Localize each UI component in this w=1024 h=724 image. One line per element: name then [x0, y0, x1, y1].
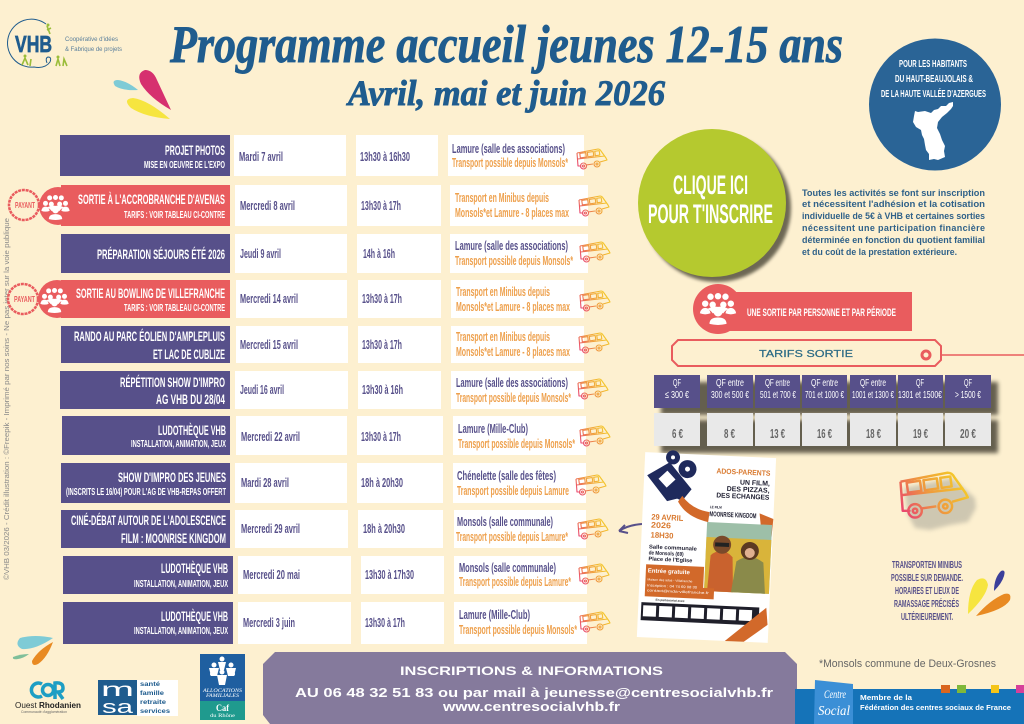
row 5: rando parc éolien — [61, 326, 609, 363]
table: QF tarifs: 6 € — [672, 427, 683, 441]
logo: MSA: sa — [102, 697, 135, 717]
row 7: ludothèque 22 avril — [62, 416, 610, 455]
row 6: répétition show: 13h30 à 16h — [362, 383, 403, 397]
icon: film camera — [645, 449, 712, 522]
logo: CAF du Rhône: FAMILIALES — [205, 694, 240, 699]
note: transport minibus: RAMASSAGE PRÉCISÉS — [894, 597, 959, 610]
poster: ados-parents film — [637, 449, 776, 643]
table: QF tarifs: > 1500 € — [955, 389, 981, 401]
logo: Ouest Rhodanien: Communauté d'agglomération — [21, 710, 67, 714]
note: transport minibus: ULTÉRIEUREMENT. — [901, 610, 953, 623]
footer: fédération des centres sociaux — [795, 680, 1024, 724]
row 7: ludothèque 22 avril: Transport possible depuis Monsols* — [458, 436, 575, 451]
poster: ados-parents film: 29 AVRIL — [651, 512, 684, 523]
row 2: accrobranche, payant — [9, 185, 609, 226]
row 5: rando parc éolien: RANDO AU PARC ÉOLIEN D'AMPLEPLUIS — [74, 328, 225, 344]
logo: VHB: & Fabrique de projets — [65, 46, 123, 53]
row 9: ciné-débat: Mercredi 29 avril — [241, 522, 300, 536]
decorative petals top left — [114, 70, 171, 119]
poster: ados-parents film: 18H30 — [650, 530, 674, 541]
row 11: ludothèque 3 juin: LUDOTHÈQUE VHB — [161, 608, 228, 624]
row 4: bowling, payant: Mercredi 14 avril — [240, 292, 298, 306]
row 10: ludothèque 20 mai: Monsols (salle communale) — [459, 560, 556, 575]
decorative petals lower right — [968, 571, 1010, 616]
footer: fédération des centres sociaux: Membre de la — [860, 693, 913, 702]
row 8: show d'impro: (INSCRITS LE 16/04) POUR L'AG DE VHB-REPAS OFFERT — [66, 486, 226, 498]
row 5: rando parc éolien: Mercredi 15 avril — [240, 338, 298, 352]
row 9: ciné-débat: 18h à 20h30 — [363, 522, 405, 536]
logo: MSA: m — [101, 680, 134, 701]
table: QF tarifs: ≤ 300 € — [665, 389, 689, 401]
logo: MSA — [98, 680, 178, 717]
footer: fédération des centres sociaux: Fédération des centres sociaux de France — [860, 703, 1011, 712]
table: QF tarifs: 1001 et 1300 € — [852, 389, 894, 401]
row 9: ciné-débat: Monsols (salle communale) — [457, 514, 553, 529]
row 6: répétition show: Jeudi 16 avril — [240, 383, 284, 397]
green button: clique ici: CLIQUE ICI — [673, 170, 748, 200]
row 7: ludothèque 22 avril: 13h30 à 17h — [361, 430, 401, 444]
paragraph: conditions: et du coût de la prestation extérieure. — [802, 247, 957, 257]
row 7: ludothèque 22 avril: Mercredi 22 avril — [241, 430, 300, 444]
blue circle: territory: DU HAUT-BEAUJOLAIS & — [895, 74, 973, 85]
row 4: bowling, payant: Transport en Minibus depuis — [456, 284, 550, 299]
row 11: ludothèque 3 juin: INSTALLATION, ANIMATION, JEUX — [134, 625, 228, 637]
green button: clique ici — [638, 129, 791, 282]
row 3: préparation séjours: PRÉPARATION SÉJOURS ÉTÉ 2026 — [97, 246, 225, 262]
row 1: projet photos: Lamure (salle des associations) — [452, 141, 565, 156]
table shadows — [661, 382, 998, 453]
row 6: répétition show — [60, 371, 608, 409]
arrow to poster — [619, 524, 642, 533]
row 2: accrobranche, payant: TARIFS : VOIR TABLEAU CI-CONTRE — [124, 209, 225, 221]
row 2: accrobranche, payant: 13h30 à 17h — [361, 199, 401, 213]
table: QF tarifs: 18 € — [866, 427, 881, 441]
row 6: répétition show: AG VHB DU 28/04 — [156, 391, 225, 407]
note: Monsols: *Monsols commune de Deux-Grosnes — [819, 658, 996, 670]
row 11: ludothèque 3 juin: Mercredi 3 juin — [243, 616, 295, 630]
row 1: projet photos: Transport possible depuis Monsols* — [452, 155, 568, 170]
row 3: préparation séjours: 14h à 16h — [363, 247, 395, 261]
paragraph: conditions: individuelle de 5€ à VHB et certaines sorties — [802, 211, 985, 221]
row 5: rando parc éolien: 13h30 à 17h — [362, 338, 402, 352]
poster: ados-parents film: Salle communale — [649, 544, 697, 553]
row 2: accrobranche, payant: Mercredi 8 avril — [240, 199, 295, 213]
logo: MSA: retraite — [140, 699, 166, 706]
row 11: ludothèque 3 juin — [63, 602, 610, 644]
banner: une sortie par personne: UNE SORTIE PAR PERSONNE ET PAR PÉRIODE — [747, 306, 896, 319]
row 8: show d'impro: Transport possible depuis Lamure — [457, 483, 569, 498]
poster: ados-parents film: LE FILM — [710, 505, 722, 510]
logo: Ouest Rhodanien: Ouest Rhodanien — [15, 701, 81, 710]
logo: MSA: famille — [140, 690, 164, 697]
panel: inscriptions et informations — [263, 652, 797, 724]
tarifs heading — [672, 340, 1024, 366]
icon: territory map — [913, 102, 953, 160]
poster: ados-parents film: En partenariat avec — [655, 598, 685, 603]
table: QF tarifs: QF entre — [716, 377, 744, 389]
poster: ados-parents film: de Monsols (69) — [649, 550, 684, 558]
row 5: rando parc éolien: Monsols*et Lamure - 8 places max — [456, 344, 570, 359]
row 8: show d'impro: SHOW D'IMPRO DES JEUNES — [118, 469, 226, 485]
poster: ados-parents film: DES PIZZAS, — [726, 486, 770, 495]
row 6: répétition show: Transport possible depuis Monsols* — [456, 390, 571, 405]
logo: CAF du Rhône: Caf — [216, 703, 230, 713]
table: QF tarifs: 701 et 1000 € — [805, 389, 844, 401]
row 4: bowling, payant: Monsols*et Lamure - 8 places max — [456, 299, 570, 314]
row 4: bowling, payant: TARIFS : VOIR TABLEAU CI-CONTRE — [124, 302, 225, 314]
row 2: accrobranche, payant: Monsols*et Lamure - 8 places max — [455, 205, 569, 220]
table: QF tarifs: 1301 et 1500€ — [898, 389, 942, 401]
row 8: show d'impro — [61, 463, 606, 503]
logo: CAF du Rhône — [200, 654, 245, 720]
title: Programme accueil jeunes 12-15 ans — [169, 16, 843, 74]
row 3: préparation séjours — [61, 234, 610, 273]
poster: ados-parents film: UN FILM, — [740, 479, 770, 488]
subtitle: Avril, mai et juin 2026 — [346, 73, 665, 113]
row 9: ciné-débat: FILM : MOONRISE KINGDOM — [121, 530, 226, 546]
row 9: ciné-débat: Transport possible depuis Lamure* — [456, 529, 568, 544]
row 11: ludothèque 3 juin: Lamure (Mille-Club) — [459, 607, 530, 622]
table: QF tarifs: 8 € — [724, 427, 735, 441]
logo: CAF du Rhône: ALLOCATIONS — [202, 689, 243, 694]
tarifs heading: TARIFS SORTIE — [759, 349, 853, 360]
row 10: ludothèque 20 mai — [63, 556, 609, 594]
logo: Ouest Rhodanien — [15, 683, 81, 714]
logo: CAF du Rhône: du Rhône — [210, 714, 236, 719]
row 2: accrobranche, payant: Transport en Minibus depuis — [455, 190, 549, 205]
row 7: ludothèque 22 avril: INSTALLATION, ANIMATION, JEUX — [131, 438, 226, 450]
row 4: bowling, payant: PAYANT — [14, 294, 36, 304]
row 11: ludothèque 3 juin: 13h30 à 17h — [365, 616, 405, 630]
paragraph: conditions: nécessitent une participation financière — [802, 223, 985, 233]
paragraph: conditions: et nécessitent l'adhésion et la cotisation — [802, 199, 985, 209]
row 5: rando parc éolien: ET LAC DE CUBLIZE — [153, 346, 225, 362]
logo: VHB: Coopérative d'idées — [65, 36, 119, 43]
row 1: projet photos: MISE EN OEUVRE DE L'EXPO — [144, 159, 225, 171]
row 10: ludothèque 20 mai: INSTALLATION, ANIMATION, JEUX — [134, 578, 228, 590]
footer: fédération des centres sociaux: Social — [818, 704, 850, 719]
film strip with partner logos — [640, 602, 768, 643]
row 5: rando parc éolien: Transport en Minibus depuis — [456, 329, 550, 344]
row 7: ludothèque 22 avril: Lamure (Mille-Club) — [458, 421, 528, 436]
row 7: ludothèque 22 avril: LUDOTHÈQUE VHB — [158, 422, 226, 438]
logo: VHB — [8, 19, 123, 67]
row 9: ciné-débat: CINÉ-DÉBAT AUTOUR DE L'ADOLESCENCE — [71, 512, 226, 528]
row 11: ludothèque 3 juin: Transport possible depuis Monsols* — [459, 622, 577, 637]
icon: large minibus — [900, 473, 976, 530]
row 4: bowling, payant — [8, 280, 610, 318]
row 6: répétition show: Lamure (salle des associations) — [456, 375, 568, 390]
poster: ados-parents film: Maison des ados - Villefranche — [647, 577, 693, 583]
table: QF tarifs: QF — [964, 377, 972, 389]
poster photo — [704, 522, 772, 594]
table: QF tarifs — [654, 375, 991, 446]
table: QF tarifs: 13 € — [770, 427, 785, 441]
poster: ados-parents film: contact@mda-villefranche.fr — [647, 588, 710, 595]
panel: inscriptions et informations: AU 06 48 32 51 83 ou par mail à jeunesse@centresocialvhb.fr — [295, 685, 773, 700]
table: QF tarifs: QF entre — [765, 377, 790, 389]
panel: inscriptions et informations: www.centresocialvhb.fr — [442, 699, 620, 714]
row 10: ludothèque 20 mai: 13h30 à 17h30 — [365, 568, 414, 582]
logo: MSA: services — [140, 708, 170, 715]
row 9: ciné-débat — [61, 510, 608, 548]
row 3: préparation séjours: Jeudi 9 avril — [240, 247, 281, 261]
banner: une sortie par personne — [693, 284, 912, 334]
table: QF tarifs: 20 € — [960, 427, 976, 441]
poster: ados-parents film: Place de l'Eglise — [648, 556, 692, 564]
table: QF tarifs: 501 et 700 € — [760, 389, 796, 401]
logo: VHB: VHB — [15, 31, 52, 57]
row 1: projet photos: 13h30 à 16h30 — [360, 150, 410, 164]
poster: ados-parents film: Entrée gratuite — [648, 568, 691, 576]
table: QF tarifs: QF entre — [811, 377, 838, 389]
vertical credit line: ©VHB 03/2026 - Crédit illustration : ©Freepik - Imprimé par nos soins - Ne pas jeter sur la voie publique — [2, 218, 11, 580]
footer: fédération des centres sociaux: Centre — [824, 687, 846, 701]
row 6: répétition show: RÉPÉTITION SHOW D'IMPRO — [120, 374, 225, 390]
blue circle: territory: POUR LES HABITANTS — [899, 59, 967, 70]
table: QF tarifs: 300 et 500 € — [711, 389, 749, 401]
row 3: préparation séjours: Lamure (salle des associations) — [455, 238, 568, 253]
poster: ados-parents film: DES ECHANGES — [716, 492, 770, 502]
note: transport minibus — [891, 559, 963, 623]
table: QF tarifs: QF — [673, 377, 681, 389]
paragraph: conditions: Toutes les activités se font sur inscription — [802, 188, 985, 198]
note: transport minibus: TRANSPORTEN MINIBUS — [892, 559, 962, 571]
poster: ados-parents film: 2026 — [651, 520, 672, 530]
row 1: projet photos — [60, 135, 607, 176]
row 3: préparation séjours: Transport possible depuis Monsols* — [455, 253, 573, 268]
decorative petals lower left — [13, 636, 53, 665]
row 10: ludothèque 20 mai: Transport possible depuis Lamure* — [459, 574, 571, 589]
logo: MSA: santé — [140, 681, 160, 688]
poster: ados-parents film: MOONRISE KINGDOM — [709, 511, 757, 520]
row 8: show d'impro: 18h à 20h30 — [361, 476, 403, 490]
row 1: projet photos: PROJET PHOTOS — [165, 142, 225, 158]
table: QF tarifs: QF entre — [860, 377, 886, 389]
row 8: show d'impro: Mardi 28 avril — [241, 476, 289, 490]
table: QF tarifs: 16 € — [817, 427, 832, 441]
table: QF tarifs: QF — [916, 377, 924, 389]
green button: clique ici: POUR T'INSCRIRE — [648, 199, 773, 229]
row 2: accrobranche, payant: PAYANT — [15, 200, 35, 210]
row 8: show d'impro: Chénelette (salle des fêtes) — [457, 468, 556, 483]
row 2: accrobranche, payant: SORTIE À L'ACCROBRANCHE D'AVENAS — [78, 191, 225, 207]
paragraph: conditions: déterminée en fonction du quotient familial — [802, 235, 985, 245]
panel: inscriptions et informations: INSCRIPTIONS & INFORMATIONS — [400, 664, 663, 678]
row 4: bowling, payant: 13h30 à 17h — [362, 292, 402, 306]
row 10: ludothèque 20 mai: LUDOTHÈQUE VHB — [161, 560, 228, 576]
note: transport minibus: POSSIBLE SUR DEMANDE. — [891, 572, 963, 584]
blue circle: territory — [869, 38, 1001, 170]
row 1: projet photos: Mardi 7 avril — [239, 150, 283, 164]
poster: ados-parents film: Inscription : 04 74 69 08 30 — [647, 583, 697, 590]
poster: ados-parents film: ADOS-PARENTS — [716, 466, 771, 478]
table: QF tarifs: 19 € — [913, 427, 928, 441]
paragraph: conditions — [802, 188, 985, 257]
row 4: bowling, payant: SORTIE AU BOWLING DE VILLEFRANCHE — [76, 285, 225, 301]
note: transport minibus: HORAIRES ET LIEUX DE — [895, 585, 959, 597]
row 10: ludothèque 20 mai: Mercredi 20 mai — [243, 568, 300, 582]
